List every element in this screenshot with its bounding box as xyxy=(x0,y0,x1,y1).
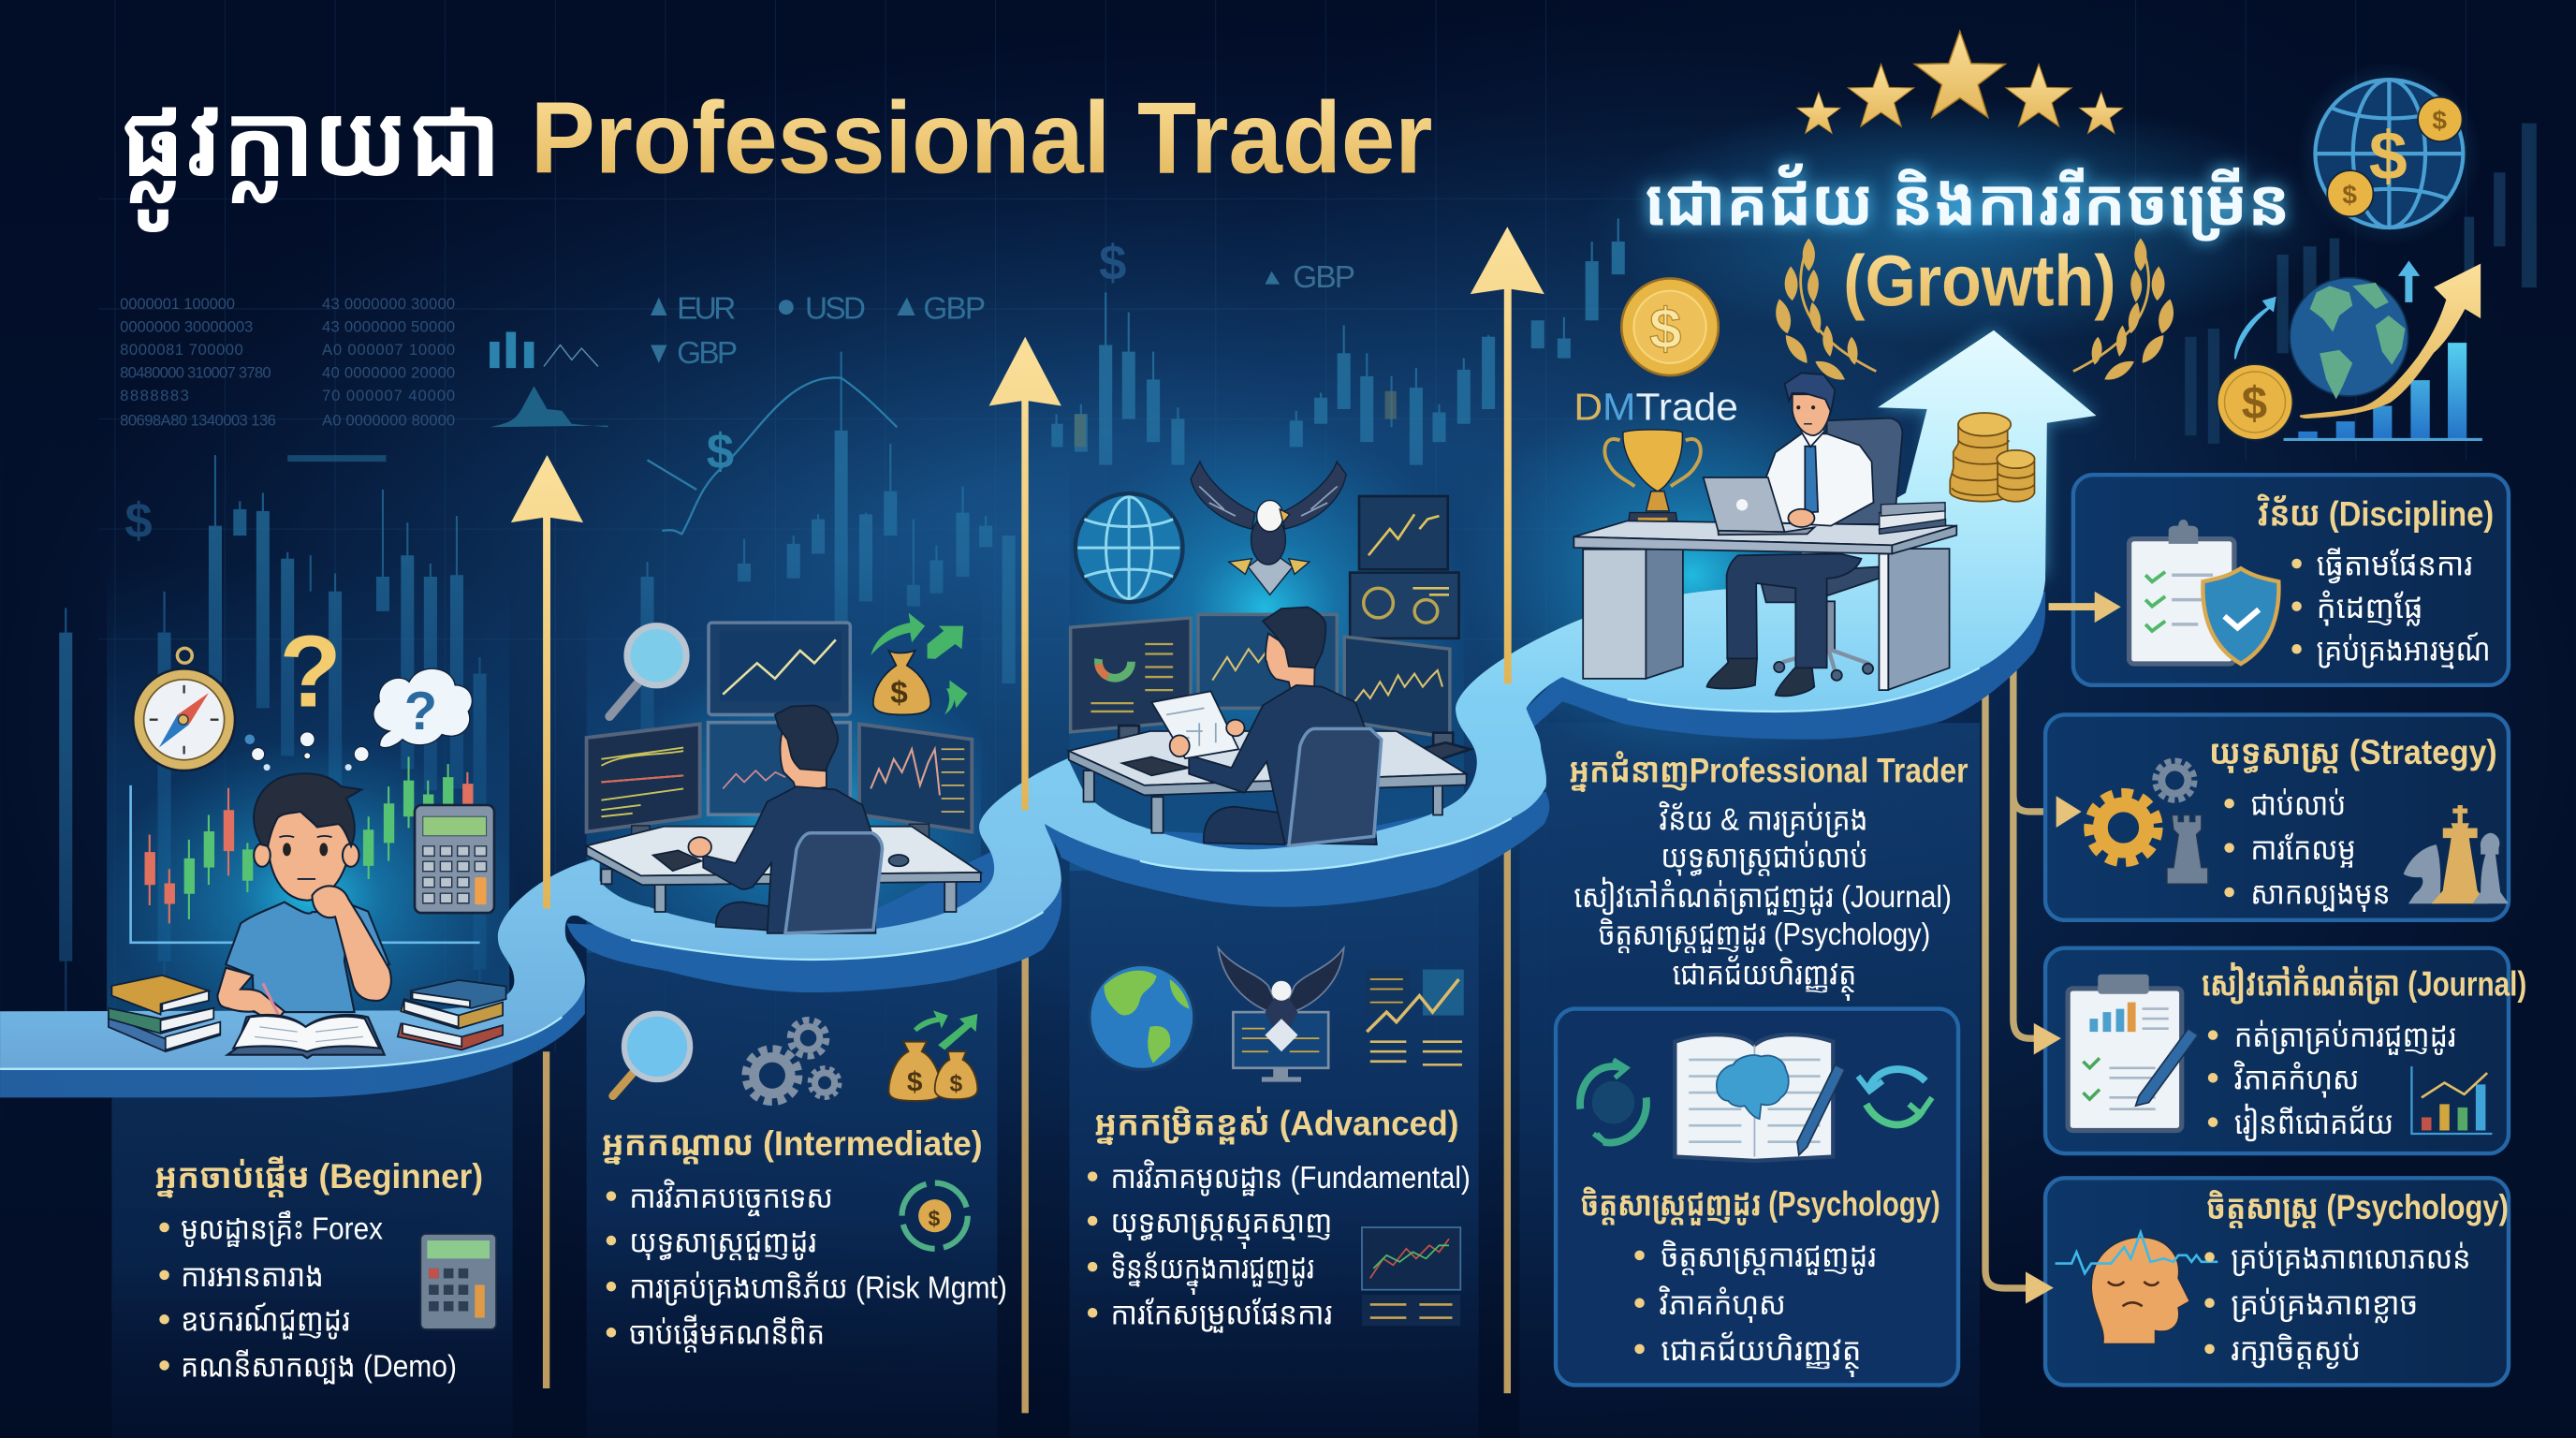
scene: beginner xyxy=(109,615,506,1058)
list: journal: រៀនពីជោគជ័យ xyxy=(2234,1103,2393,1142)
background market data tables: 43 0000000 30000 xyxy=(322,295,455,313)
icon: gold coin: $ xyxy=(1649,297,1681,361)
trader legs xyxy=(1707,553,1862,696)
icon: dollar globe xyxy=(2297,62,2481,245)
chart: candles behind student xyxy=(131,756,480,943)
icon: clipboard with shield xyxy=(2130,520,2278,664)
student figure xyxy=(217,773,391,1027)
icon: laurel left xyxy=(1776,238,1876,380)
growth heading: ជោគជ័យ និងការរីកចម្រើន xyxy=(1645,162,2291,242)
ribbon path with growth arrow xyxy=(0,330,2096,1069)
list: strategy xyxy=(2224,787,2391,912)
list: intermediate: ចាប់ផ្តើមគណនីពិត xyxy=(629,1314,825,1353)
background market data tables: A0 000007 10000 xyxy=(322,341,455,359)
list: strategy: ការកែលម្អ xyxy=(2250,832,2356,869)
icon: dollar coin xyxy=(2217,364,2292,440)
icon: books left xyxy=(109,976,220,1051)
icon: eagle on monitor xyxy=(1218,948,1344,1079)
background currency labels: GBP xyxy=(1293,260,1355,295)
gold stems below ribbon and connector lines xyxy=(547,666,2060,1413)
list: psychology xyxy=(2204,1241,2471,1370)
monitors: three screens xyxy=(587,723,972,855)
list: discipline: គ្រប់គ្រងអារម្មណ៍ xyxy=(2317,631,2491,669)
list: advanced: ទិន្នន័យក្នុងការជួញដូរ xyxy=(1110,1250,1314,1295)
icon: money bags: $ xyxy=(907,1066,923,1097)
list: beginner: គណនីសាកល្បង (Demo) xyxy=(181,1349,457,1385)
background currency labels: USD xyxy=(805,291,866,326)
list: beginner: ការអានតារាង xyxy=(181,1259,324,1294)
chart: growth bars xyxy=(2284,343,2482,439)
list: discipline: កុំដេញផ្លែ xyxy=(2317,590,2423,627)
icon: dollar globe: $ xyxy=(2432,106,2447,135)
growth arrow glow xyxy=(1878,330,2096,580)
panel: trader psychology xyxy=(1556,1009,1958,1385)
list: beginner: ឧបករណ៍ជួញដូរ xyxy=(181,1302,350,1339)
list: trader psychology: ចិត្តសាស្ត្រការជួញដូរ xyxy=(1661,1240,1876,1276)
faint candles behind growth icons xyxy=(2185,124,2537,444)
scene: professional trader xyxy=(1573,278,2035,696)
icon: money cycle xyxy=(902,1183,968,1249)
heading: strategy: យុទ្ធសាស្ត្រ (Strategy) xyxy=(2210,733,2497,774)
icon: right cycle xyxy=(1858,1069,1932,1124)
icon: thought bubble: ? xyxy=(404,682,437,741)
list: intermediate: យុទ្ធសាស្រ្តជួញដូរ xyxy=(629,1225,816,1261)
icon: eagle xyxy=(1191,462,1346,594)
list: strategy: សាកល្បងមុន xyxy=(2250,876,2391,912)
heading: psychology: ចិត្តសាស្ត្រ (Psychology) xyxy=(2206,1188,2509,1228)
panel: strategy xyxy=(2045,714,2509,920)
background candlesticks xyxy=(59,218,1625,1051)
icon: coin stacks xyxy=(1950,413,2035,502)
panel: journal xyxy=(2045,948,2526,1153)
icon: thought bubble xyxy=(245,668,472,770)
list: professional trader xyxy=(1573,800,1952,1001)
trader figure from behind xyxy=(688,705,883,933)
desk xyxy=(587,827,981,912)
list: psychology: គ្រប់គ្រងភាពលោភលន់ xyxy=(2231,1241,2471,1277)
heading: advanced: អ្នកកម្រិតខ្ពស់ (Advanced) xyxy=(1094,1105,1459,1146)
icon: earth xyxy=(1090,964,1194,1070)
background market data tables: 0000000 30000003 xyxy=(120,318,253,336)
icon: magnifier xyxy=(613,1014,690,1096)
heading: intermediate: អ្នកកណ្តាល (Intermediate) xyxy=(601,1124,983,1166)
heading: beginner: អ្នកចាប់ផ្តើម (Beginner) xyxy=(154,1154,483,1198)
icon: money bag with arrows xyxy=(871,613,968,714)
trader reading figure xyxy=(1151,607,1382,845)
background market data tables: 40 0000000 20000 xyxy=(322,364,455,382)
list: intermediate: ការគ្រប់គ្រងហានិភ័យ (Risk Mgmt) xyxy=(629,1269,1007,1306)
chair and legs xyxy=(1759,418,1902,681)
icon: money bag with arrows: $ xyxy=(890,676,908,711)
background market data tables xyxy=(120,295,455,430)
icon: question mark: ? xyxy=(279,615,342,729)
list: advanced xyxy=(1088,1159,1471,1333)
icon: globe outline xyxy=(1076,493,1183,602)
icon: rising gold arrow xyxy=(2300,264,2481,418)
background market data tables: A0 0000000 80000 xyxy=(322,412,455,430)
icon: mini growth chart xyxy=(2411,1066,2492,1134)
list: beginner xyxy=(159,1211,457,1385)
icon: gears and rook xyxy=(2089,761,2208,884)
text block: intermediate xyxy=(601,1010,1007,1353)
background market data tables: 43 0000000 50000 xyxy=(322,318,455,336)
background market data tables: 0000001 100000 xyxy=(120,295,235,313)
list: discipline: ធ្វើតាមផែនការ xyxy=(2317,547,2472,584)
monitors: side screens xyxy=(1071,496,1471,759)
icon: dollar globe: $ xyxy=(2369,116,2408,194)
growth heading xyxy=(1645,162,2291,321)
heading: discipline: វិន័យ (Discipline) xyxy=(2257,493,2494,534)
icon: analytics chart xyxy=(1365,969,1464,1064)
list: journal xyxy=(2208,1020,2456,1142)
scene: advanced xyxy=(1069,462,1471,845)
connector arrows xyxy=(2026,592,2121,1304)
icon: journal clipboard with pen xyxy=(2068,975,2198,1130)
icon: left cycle xyxy=(1580,1060,1647,1143)
growth heading: ជោគជ័យ និងការរីកចម្រើន xyxy=(1645,162,2291,242)
list: advanced: ការវិភាគមូលដ្ឋាន (Fundamental) xyxy=(1110,1159,1471,1196)
list: professional trader: វិន័យ & ការគ្រប់គ្រង xyxy=(1659,800,1868,838)
desk xyxy=(1069,731,1467,833)
list: beginner: មូលដ្ឋានគ្រឹះ Forex xyxy=(181,1211,383,1247)
icon: head with pulse xyxy=(2056,1232,2217,1344)
desk xyxy=(1573,521,1956,690)
heading: trader psychology: ចិត្តសាស្ត្រជួញដូរ (Psychology) xyxy=(1580,1185,1940,1226)
icon: money bags xyxy=(889,1010,977,1101)
text block: beginner xyxy=(154,1154,496,1385)
icon: books on desk xyxy=(1879,503,1946,534)
list: professional trader: យុទ្ធសាស្ត្រជាប់លាប់ xyxy=(1661,841,1868,877)
list: professional trader: សៀវភៅកំណត់ត្រាជួញដូរ (Journal) xyxy=(1573,876,1952,916)
text block: professional trader xyxy=(1569,750,1969,1001)
icon: calculator xyxy=(415,805,494,913)
background currency labels: $ xyxy=(1099,235,1126,290)
scene: intermediate xyxy=(587,613,981,933)
list: professional trader: ជោគជ័យហិរញ្ញវត្ថុ xyxy=(1673,954,1856,1001)
icon: calculator small xyxy=(420,1234,496,1329)
list: advanced: យុទ្ធសាស្ត្រស្មុគស្មាញ xyxy=(1110,1205,1332,1249)
background currency labels xyxy=(124,235,1355,549)
trader figure xyxy=(1704,373,1873,535)
list: psychology: រក្សាចិត្តស្ងប់ xyxy=(2231,1333,2361,1370)
icon: compass xyxy=(133,648,235,770)
panel: psychology xyxy=(2045,1178,2509,1385)
icon: money bags: $ xyxy=(949,1071,962,1096)
list: trader psychology: វិភាគកំហុស xyxy=(1659,1285,1786,1323)
icon: candlestick screen xyxy=(1362,1227,1460,1326)
monitor: top chart xyxy=(709,623,850,714)
title: Professional Trader xyxy=(531,81,1432,195)
background currency labels: $ xyxy=(124,493,153,549)
ribbon rim highlights xyxy=(0,668,1980,1069)
list: strategy: ជាប់លាប់ xyxy=(2250,787,2346,822)
list: journal: វិភាគកំហុស xyxy=(2233,1060,2359,1097)
background market data tables: 70 000007 40000 xyxy=(322,387,455,404)
background market data tables: 8888883 xyxy=(120,387,189,404)
background currency labels: $ xyxy=(707,424,734,479)
icon: magnifier xyxy=(609,626,686,716)
growth heading: (Growth) xyxy=(1843,241,2116,321)
icon: earth xyxy=(2290,278,2408,399)
gold arrows xyxy=(511,227,1544,909)
icon: small curved arrow xyxy=(2234,297,2276,359)
icon: laurel right xyxy=(2073,238,2174,380)
list: psychology: គ្រប់គ្រងភាពខ្លាច xyxy=(2231,1287,2418,1324)
heading: professional trader: អ្នកជំនាញProfessional Trader xyxy=(1569,750,1969,792)
list: intermediate: ការវិភាគបច្ចេកទេស xyxy=(629,1179,833,1217)
list: trader psychology: ជោគជ័យហិរញ្ញវត្ថុ xyxy=(1661,1330,1862,1377)
icon: book with brain xyxy=(1675,1034,1845,1161)
list: intermediate xyxy=(607,1179,1007,1353)
stars xyxy=(1797,31,2123,134)
icon: money cycle: $ xyxy=(929,1206,941,1230)
icon: trophy xyxy=(1604,430,1701,533)
background currency labels: GBP xyxy=(677,336,738,371)
background market data tables: 80698A80 1340003 136 xyxy=(120,412,276,430)
background currency labels: EUR xyxy=(677,291,736,326)
icon: gears xyxy=(746,1020,840,1102)
panel: discipline xyxy=(2073,475,2509,685)
list: professional trader: ចិត្តសាស្ត្រជួញដូរ (Psychology) xyxy=(1599,917,1930,954)
icon: earth with growth arrow and bars xyxy=(2217,260,2482,440)
list: advanced: ការកែសម្រួលផែនការ xyxy=(1110,1298,1332,1333)
list: discipline xyxy=(2291,547,2491,669)
icon: gold coin xyxy=(1621,278,1719,375)
text block: advanced xyxy=(1088,948,1471,1333)
background currency labels: GBP xyxy=(923,291,986,326)
icon: books right xyxy=(398,980,506,1049)
icon: chess pieces xyxy=(2404,805,2509,903)
list: journal: កត់ត្រាគ្រប់ការជួញដូរ xyxy=(2234,1020,2456,1055)
icon: small up arrow xyxy=(2398,260,2420,302)
icon: dollar globe: $ xyxy=(2342,180,2357,209)
icon: open book xyxy=(227,1015,385,1058)
title: ផ្លូវក្លាយជា xyxy=(120,84,501,232)
background market data tables: 80480000 310007 3780 xyxy=(120,364,271,382)
logo: DMTrade: DMTrade xyxy=(1573,385,1738,428)
ribbon underside xyxy=(0,592,2045,1097)
background mini charts xyxy=(287,332,897,534)
background market data tables: 8000081 700000 xyxy=(120,341,243,359)
list: trader psychology xyxy=(1634,1240,1876,1377)
icon: dollar coin: $ xyxy=(2242,379,2267,430)
title xyxy=(120,81,1432,232)
